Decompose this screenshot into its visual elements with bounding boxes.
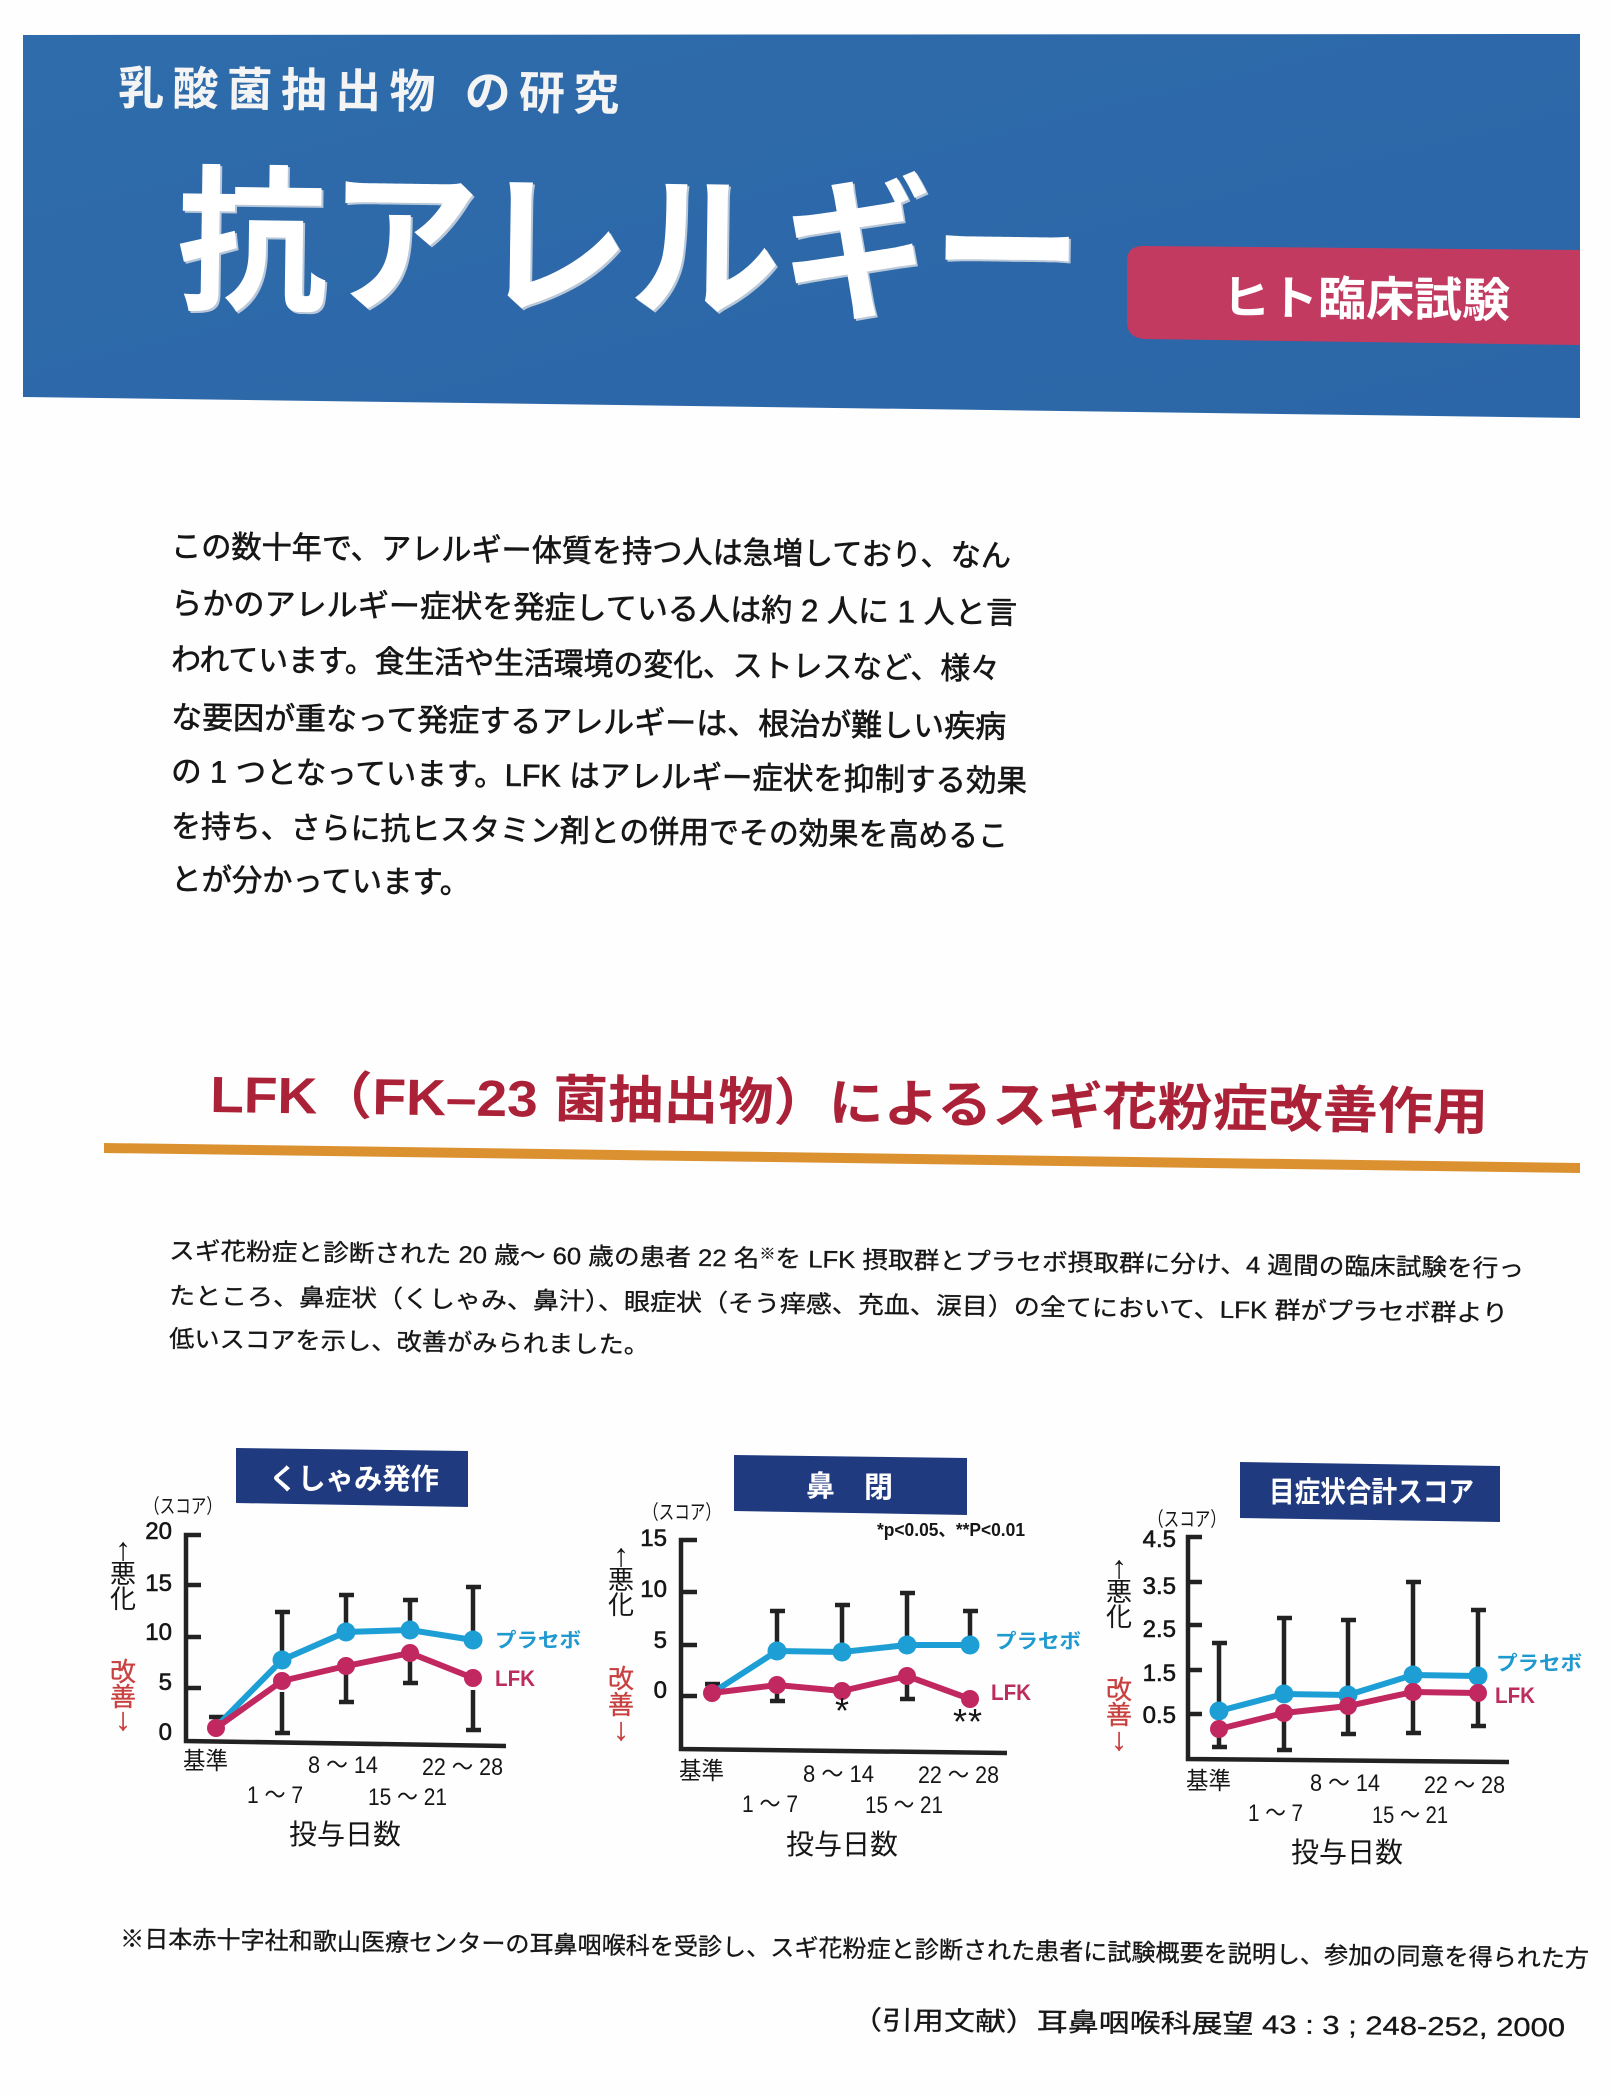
error bars: [705, 1593, 978, 1701]
x axis day labels: 8 〜 14: [308, 1752, 378, 1779]
text block: trial description: 低いスコアを示し、改善がみられました。: [169, 1326, 649, 1359]
direction label: improved: [1106, 1675, 1132, 1757]
chart title: [1240, 1462, 1500, 1522]
text block: allergy introduction: の 1 つとなっています。LFK はアレルギー症状を抑制する効果: [171, 754, 1027, 799]
chart title: [734, 1455, 967, 1515]
direction label: worse: 悪: [1106, 1577, 1132, 1607]
x axis day labels: 22 〜 28: [1424, 1772, 1505, 1799]
direction label: worse: ↑: [613, 1537, 629, 1573]
LFK series: [207, 1644, 482, 1737]
x axis day labels: [183, 1748, 503, 1811]
y axis tick labels: 10: [640, 1576, 667, 1603]
badge: human clinical trial: [1127, 246, 1580, 345]
placebo series: [216, 1620, 482, 1727]
chart title: 鼻: [806, 1470, 835, 1503]
direction label: worse: 悪: [608, 1565, 634, 1595]
direction label: worse: [1106, 1549, 1132, 1632]
main title: 抗アレルギー: [176, 156, 1084, 344]
citation: （引用文献）耳鼻咽喉科展望 43 : 3 ; 248-252, 2000: [851, 2005, 1565, 2042]
series label: placebo: プラセボ: [495, 1629, 581, 1652]
direction label: improved: ↓: [613, 1711, 629, 1747]
text block: allergy introduction: とが分かっています。: [171, 862, 470, 900]
direction label: improved: 改: [110, 1657, 136, 1687]
footnote: ※日本赤十字社和歌山医療センターの耳鼻咽喉科を受診し、スギ花粉症と診断された患者に試験概要を説明し、参加の同意を得られた方: [120, 1926, 1589, 1973]
chart title: [236, 1448, 468, 1507]
chart: nasal congestion: [608, 1455, 1081, 1860]
direction label: improved: 改: [608, 1664, 634, 1694]
direction label: improved: [110, 1657, 136, 1737]
axes: [1188, 1537, 1509, 1762]
chart title: 目症状合計スコア: [1269, 1476, 1474, 1509]
series label: placebo: プラセボ: [995, 1630, 1081, 1653]
error bars: [209, 1587, 481, 1733]
section heading: LFK（FK–23 菌抽出物）によるスギ花粉症改善作用: [210, 1066, 1489, 1141]
y axis tick labels: 10: [145, 1619, 172, 1646]
significance marker: day 22-28: **: [953, 1701, 983, 1742]
x axis day labels: 22 〜 28: [918, 1762, 999, 1789]
series label: LFK: LFK: [1495, 1683, 1535, 1708]
y axis tick labels: 15: [640, 1525, 667, 1552]
error bars: [1212, 1582, 1486, 1750]
panel: title banner: [23, 34, 1580, 418]
chart: total eye symptom score: [1106, 1462, 1582, 1868]
x axis title: 投与日数: [1291, 1837, 1403, 1868]
x axis day labels: [1186, 1768, 1505, 1829]
series label: LFK: LFK: [495, 1666, 535, 1691]
y axis tick labels: 4.5: [1143, 1526, 1176, 1553]
LFK series: [703, 1667, 979, 1708]
x axis day labels: 1 〜 7: [742, 1791, 798, 1818]
x axis day labels: 基準: [183, 1748, 228, 1775]
direction label: worse: 化: [608, 1590, 634, 1620]
text block: allergy introduction: を持ち、さらに抗ヒスタミン剤との併用でその効果を高めるこ: [171, 809, 1008, 853]
y axis tick labels: 0: [159, 1719, 172, 1746]
text block: allergy introduction: この数十年で、アレルギー体質を持つ人は急増しており、なん: [171, 529, 1011, 574]
direction label: improved: 善: [608, 1690, 634, 1720]
series label: LFK: LFK: [991, 1680, 1031, 1705]
placebo series: [1210, 1666, 1488, 1720]
y axis tick labels: 3.5: [1143, 1573, 1176, 1600]
direction label: worse: 化: [1106, 1602, 1132, 1632]
direction label: improved: 改: [1106, 1675, 1132, 1705]
direction label: worse: 悪: [110, 1559, 136, 1589]
direction label: improved: 善: [1106, 1700, 1132, 1730]
direction label: worse: ↑: [1111, 1549, 1127, 1585]
chart title: 閉: [864, 1472, 893, 1504]
significance note: *p<0.05、**P<0.01: [877, 1520, 1025, 1540]
x axis day labels: 1 〜 7: [1248, 1800, 1303, 1827]
text block: allergy introduction: [171, 529, 1027, 900]
direction label: worse: [110, 1531, 136, 1614]
direction label: improved: [608, 1664, 634, 1747]
subtitle: 乳酸菌抽出物 の研究: [118, 62, 619, 120]
x axis day labels: 基準: [679, 1758, 724, 1785]
x axis title: 投与日数: [289, 1819, 401, 1850]
significance marker: day 8-14: *: [835, 1690, 849, 1731]
main title: 抗アレルギー: [178, 158, 1086, 346]
text block: allergy introduction: な要因が重なって発症するアレルギーは、根治が難しい疾病: [171, 700, 1006, 744]
y axis tick labels: 1.5: [1143, 1660, 1176, 1687]
x axis day labels: 8 〜 14: [803, 1761, 874, 1788]
y axis tick labels: 20: [145, 1518, 172, 1545]
placebo series: [712, 1636, 980, 1693]
y axis unit: （スコア）: [643, 1501, 721, 1524]
text block: allergy introduction: らかのアレルギー症状を発症している人は約 2 人に 1 人と言: [171, 586, 1017, 631]
y axis tick labels: 2.5: [1143, 1616, 1176, 1643]
text block: trial description: たところ、鼻症状（くしゃみ、鼻汁）、眼症状（そう痒感、充血、涙目）の全てにおいて、LFK 群がプラセボ群より: [169, 1283, 1508, 1328]
text block: trial description: [169, 1238, 1524, 1359]
y axis tick labels: 5: [654, 1627, 667, 1654]
text block: allergy introduction: われています。食生活や生活環境の変化、ストレスなど、様々: [171, 642, 1000, 686]
y axis tick labels: [145, 1518, 172, 1746]
LFK series: [1210, 1683, 1487, 1738]
x axis day labels: 基準: [1186, 1768, 1231, 1795]
y axis unit: （スコア）: [144, 1495, 222, 1518]
direction label: improved: ↓: [1111, 1721, 1127, 1757]
axes: [681, 1540, 1007, 1753]
y axis tick labels: 5: [159, 1669, 172, 1696]
y axis tick labels: [640, 1525, 667, 1704]
text block: trial description: を LFK 摂取群とプラセボ摂取群に分け、4 週間の臨床試験を行っ: [775, 1246, 1524, 1283]
x axis day labels: 8 〜 14: [1310, 1770, 1380, 1797]
y axis tick labels: 15: [145, 1570, 172, 1597]
y axis tick labels: [1143, 1526, 1176, 1729]
y axis unit: （スコア）: [1148, 1508, 1226, 1531]
series label: placebo: プラセボ: [1496, 1652, 1582, 1675]
direction label: improved: ↓: [115, 1701, 131, 1737]
x axis day labels: 15 〜 21: [1372, 1802, 1448, 1829]
chart title: くしゃみ発作: [269, 1463, 439, 1496]
x axis day labels: 1 〜 7: [247, 1782, 303, 1809]
y axis tick labels: 0.5: [1143, 1702, 1176, 1729]
x axis day labels: 22 〜 28: [422, 1754, 503, 1781]
direction label: worse: 化: [110, 1584, 136, 1614]
chart: sneezing attacks: [110, 1448, 581, 1850]
x axis day labels: 15 〜 21: [865, 1792, 943, 1819]
x axis day labels: 15 〜 21: [368, 1784, 447, 1811]
x axis day labels: [679, 1758, 999, 1819]
direction label: improved: 善: [110, 1682, 136, 1712]
text block: trial description: スギ花粉症と診断された 20 歳〜 60 歳の患者 22 名: [169, 1238, 721, 1272]
direction label: worse: ↑: [115, 1531, 131, 1567]
badge: human clinical trial: ヒト臨床試験: [1222, 271, 1510, 327]
x axis title: 投与日数: [786, 1829, 898, 1860]
text block: trial description: ※: [759, 1246, 776, 1263]
axes: [186, 1535, 506, 1746]
y axis tick labels: 0: [654, 1677, 667, 1704]
direction label: worse: [608, 1537, 634, 1620]
